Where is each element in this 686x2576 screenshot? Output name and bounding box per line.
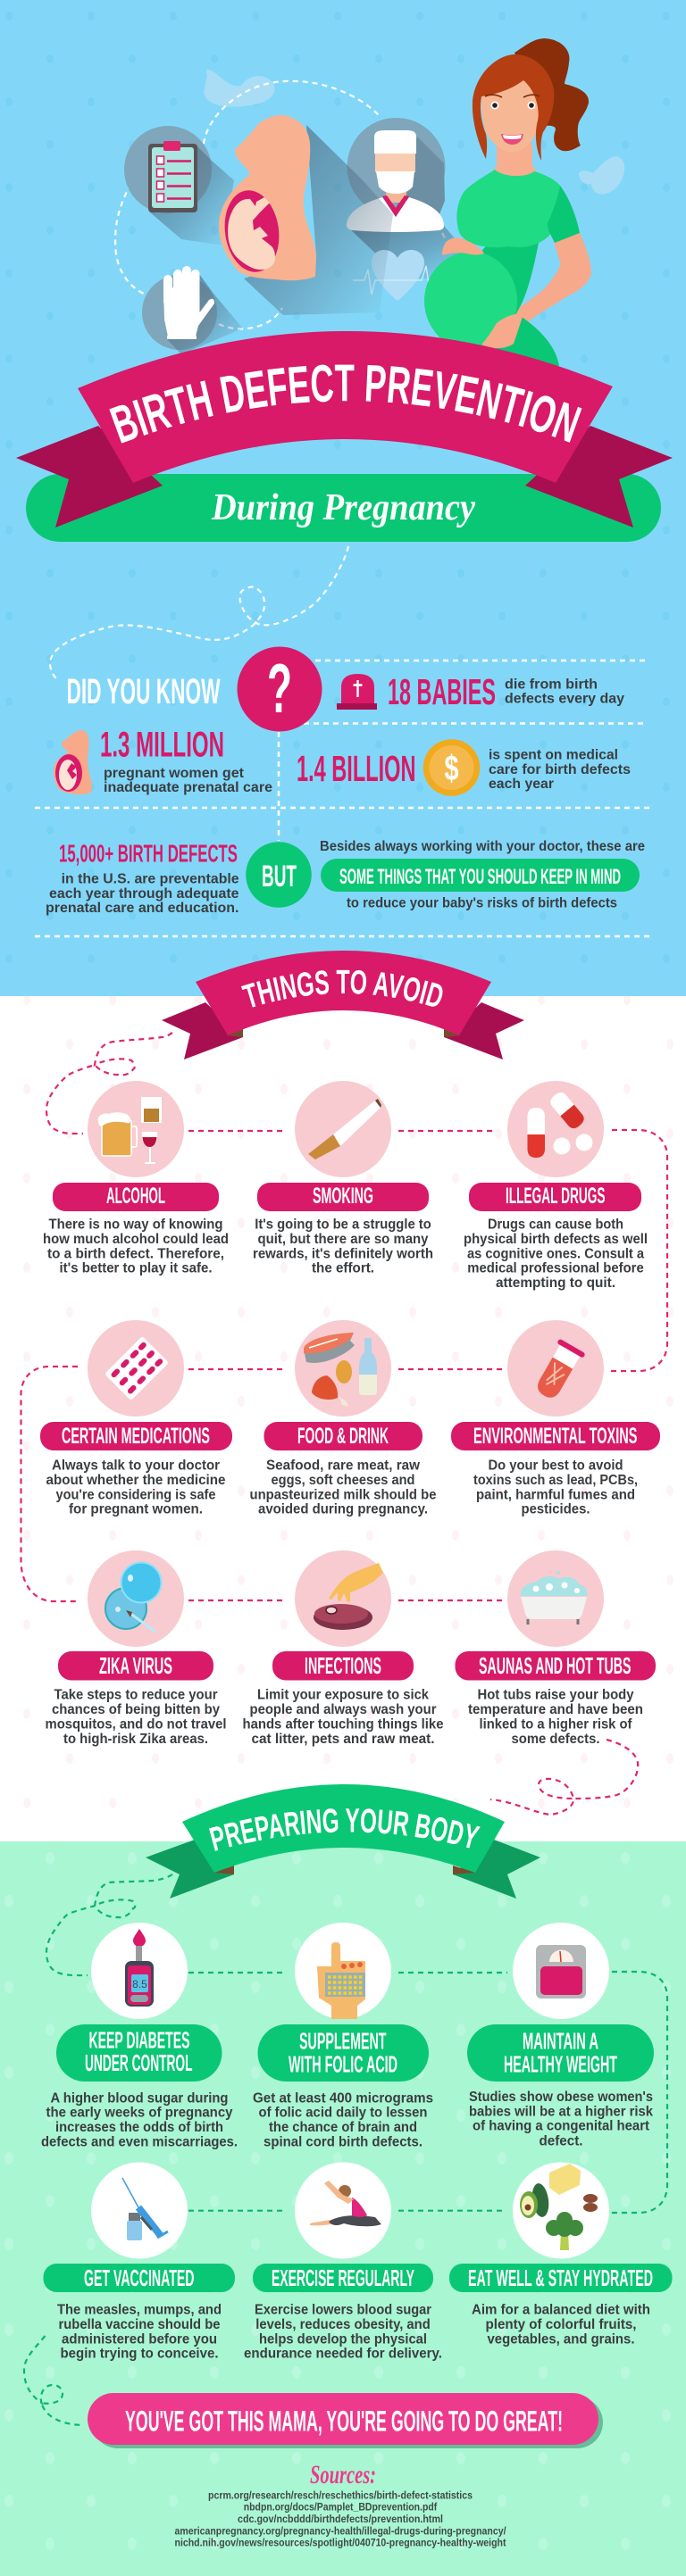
description	[468, 1688, 643, 1747]
source links: nichd.nih.gov/news/resources/spotlight/040710-pregnancy-healthy-weight	[175, 2537, 506, 2549]
description: defect.	[540, 2133, 582, 2148]
description	[469, 2090, 653, 2148]
sleeve	[548, 186, 580, 243]
neck	[490, 143, 539, 180]
description: rubella vaccine should be	[59, 2317, 221, 2332]
stat: 18 babies: 18 BABIES	[388, 671, 496, 712]
description: eggs, soft cheeses and	[272, 1473, 414, 1488]
icon: tombstone	[337, 674, 377, 710]
description: people and always wash your	[250, 1702, 436, 1717]
description	[472, 2303, 650, 2347]
label pill: CERTAIN MEDICATIONS	[62, 1424, 210, 1449]
description: toxins such as lead, PCBs,	[473, 1473, 638, 1488]
description: of having a congenital heart	[473, 2119, 649, 2134]
label pill: SUPPLEMENT	[299, 2029, 387, 2054]
icon: virus cell and needle	[88, 1550, 184, 1647]
description	[45, 1688, 227, 1747]
label pill: INFECTIONS	[305, 1652, 381, 1679]
stat: 1.3 million	[54, 725, 272, 795]
description: The measles, mumps, and	[57, 2303, 222, 2318]
description: chances of being bitten by	[52, 1702, 220, 1717]
icon: heart rate	[353, 250, 432, 301]
stat: 1.3 million: inadequate prenatal care	[104, 780, 272, 795]
icon: womb with fetus	[219, 115, 393, 315]
card: infections	[243, 1550, 444, 1747]
heading: did you know: DID YOU KNOW	[66, 672, 221, 711]
banner: things to avoid: THINGS TO AVOID	[241, 969, 443, 1007]
icon: yoga figure	[295, 2162, 391, 2258]
description	[57, 2303, 222, 2362]
label pill	[40, 1422, 232, 1450]
label pill: GET VACCINATED	[84, 2266, 195, 2291]
label pill: EXERCISE REGULARLY	[272, 2266, 414, 2291]
card: keep diabetes under control	[41, 1923, 238, 2149]
icon: hand and raw meat	[295, 1550, 391, 1647]
stat: 18 babies: die from birth	[505, 677, 598, 693]
card: eat well and stay hydrated	[449, 2162, 672, 2347]
description: the chance of brain and	[269, 2120, 417, 2135]
description	[464, 1217, 648, 1291]
card: get vaccinated	[43, 2162, 235, 2362]
label pill: ALCOHOL	[106, 1184, 165, 1209]
label pill	[272, 1651, 414, 1680]
right ribbon tail	[525, 426, 673, 528]
description: cat litter, pets and raw meat.	[252, 1732, 434, 1747]
icon: beer and wine	[88, 1081, 184, 1177]
card: environmental toxins	[451, 1320, 660, 1517]
card: smoking	[253, 1081, 433, 1276]
label pill: UNDER CONTROL	[85, 2051, 193, 2076]
stat: 18 babies: defects every day	[505, 692, 624, 707]
description: It's going to be a struggle to	[255, 1217, 431, 1233]
description	[43, 1217, 229, 1276]
description: increases the odds of birth	[55, 2120, 223, 2135]
description: Seafood, rare meat, raw	[266, 1458, 421, 1473]
description: linked to a higher risk of	[479, 1716, 632, 1732]
icon: glucose meter	[91, 1923, 188, 2019]
label pill: ILLEGAL DRUGS	[506, 1184, 606, 1209]
description: as cognitive ones. Consult a	[467, 1246, 644, 1261]
icon: bathroom scale	[513, 1923, 609, 2019]
source links: americanpregnancy.org/pregnancy-health/illegal-drugs-during-pregnancy/	[175, 2524, 506, 2537]
description: defects and even miscarriages.	[41, 2134, 238, 2149]
card: certain medications	[40, 1320, 232, 1517]
description: to a birth defect. Therefore,	[47, 1246, 224, 1261]
icon: glove	[142, 266, 243, 354]
panel: did you know statistics	[35, 646, 651, 936]
card: alcohol	[43, 1081, 229, 1276]
label pill	[43, 2264, 235, 2292]
source links	[175, 2489, 506, 2549]
description	[244, 2303, 442, 2362]
stat: 1.3 million: pregnant women get	[104, 766, 244, 781]
label pill: WITH FOLIC ACID	[289, 2053, 397, 2078]
dashed connector into stats	[50, 546, 348, 680]
keep in mind callout	[320, 839, 645, 911]
source links: nbdpn.org/docs/Pamplet_BDprevention.pdf	[244, 2501, 438, 2514]
arm behind	[481, 233, 591, 347]
label pill	[253, 2264, 433, 2292]
closing message pill	[88, 2393, 603, 2448]
label pill	[469, 1183, 641, 1211]
description: A higher blood sugar during	[50, 2090, 229, 2106]
description	[253, 1217, 433, 1276]
icon: test tube	[507, 1320, 604, 1417]
description: Take steps to reduce your	[54, 1688, 218, 1703]
icon: salmon, egg, ham, milk	[295, 1320, 391, 1417]
description: attempting to quit.	[496, 1276, 615, 1291]
banner: preparing your body	[146, 1784, 540, 1899]
description: some defects.	[511, 1732, 600, 1747]
description: Get at least 400 micrograms	[253, 2090, 433, 2106]
description: spinal cord birth defects.	[264, 2134, 422, 2149]
keep in mind callout: Besides always working with your doctor, these are	[320, 839, 645, 854]
face	[481, 77, 543, 153]
but badge: BUT	[262, 860, 297, 893]
faint baby silhouettes	[204, 70, 624, 194]
label pill	[264, 1422, 422, 1450]
title text: BIRTH DEFECT PREVENTION	[109, 364, 582, 444]
dividers and vertical line	[35, 661, 651, 936]
card: illegal drugs	[464, 1081, 648, 1291]
description: babies will be at a higher risk	[469, 2104, 653, 2119]
description: hands after touching things like	[243, 1716, 444, 1732]
connector lines: preparing your body	[24, 1874, 667, 2425]
keep in mind callout: to reduce your baby's risks of birth defects	[347, 896, 617, 911]
icon: cigarette	[295, 1081, 391, 1177]
description: quit, but there are so many	[257, 1232, 429, 1247]
description: for pregnant women.	[69, 1502, 203, 1517]
source links: pcrm.org/research/resch/reschethics/birth-defect-statistics	[208, 2489, 473, 2501]
description	[250, 1458, 437, 1517]
description	[41, 2090, 238, 2149]
question mark badge	[238, 646, 322, 732]
card: maintain a healthy weight	[467, 1923, 654, 2148]
card: exercise regularly	[244, 2162, 442, 2362]
description: Aim for a balanced diet with	[472, 2303, 650, 2318]
description: mosquitos, and do not travel	[45, 1716, 227, 1732]
question mark badge: ?	[267, 649, 292, 727]
stat: 15,000+ birth defects	[46, 840, 239, 916]
eyes	[485, 95, 540, 109]
description: begin trying to conceive.	[61, 2347, 218, 2362]
stat: 1.3 million: 1.3 MILLION	[100, 725, 224, 764]
icon: doctor	[347, 118, 466, 278]
description: Limit your exposure to sick	[257, 1688, 429, 1703]
stat: 1.4 billion	[297, 739, 631, 796]
label pill: KEEP DIABETES	[89, 2028, 189, 2053]
ribbon subtitle pill	[26, 474, 661, 542]
description: levels, reduces obesity, and	[255, 2317, 431, 2332]
belly	[424, 252, 517, 350]
label pill	[58, 1651, 213, 1680]
description: the early weeks of pregnancy	[46, 2106, 233, 2121]
description: physical birth defects as well	[464, 1232, 648, 1247]
left ribbon tail	[16, 426, 163, 528]
stat: 15,000+ birth defects: each year through adequate	[49, 886, 239, 902]
card: supplement with folic acid	[253, 1923, 433, 2149]
label pill	[257, 2024, 429, 2082]
description: Studies show obese women's	[469, 2090, 653, 2105]
description: Drugs can cause both	[488, 1217, 623, 1233]
icon: healthy foods	[513, 2162, 609, 2258]
label pill	[257, 1183, 429, 1211]
title ribbon	[16, 331, 673, 542]
sources heading: Sources:	[310, 2460, 376, 2489]
icon: hand holding pills	[295, 1923, 391, 2019]
stat: 1.4 billion: 1.4 BILLION	[297, 748, 416, 789]
icon: syringe and vial	[91, 2162, 188, 2258]
connector lines: things to avoid	[21, 1033, 667, 1815]
description: rewards, it's definitely worth	[253, 1246, 433, 1261]
hair ponytail	[514, 38, 589, 151]
description: vegetables, and grains.	[488, 2331, 634, 2347]
stat: 1.4 billion: each year	[489, 777, 554, 792]
description: avoided during pregnancy.	[258, 1502, 428, 1517]
stat: 1.4 billion: care for birth defects	[489, 762, 631, 777]
description: you're considering is safe	[55, 1487, 216, 1502]
banner: things to avoid	[162, 951, 524, 1059]
source links: cdc.gov/ncbddd/birthdefects/prevention.html	[238, 2513, 443, 2525]
stat: 18 babies	[337, 671, 624, 712]
mouth	[501, 134, 523, 145]
woman	[424, 38, 591, 375]
description	[46, 1458, 226, 1517]
description: Do your best to avoid	[488, 1458, 623, 1473]
description: to high-risk Zika areas.	[63, 1732, 208, 1747]
stat: 1.4 billion: is spent on medical	[489, 748, 618, 763]
label pill	[53, 1183, 219, 1211]
description: of folic acid daily to lessen	[259, 2106, 427, 2121]
label pill: MAINTAIN A	[523, 2029, 598, 2054]
description: paint, harmful fumes and	[476, 1487, 635, 1502]
icon: glucose meter: 8.5	[132, 1978, 147, 1990]
description	[243, 1688, 444, 1747]
label pill: FOOD & DRINK	[297, 1424, 389, 1449]
description: Always talk to your doctor	[52, 1458, 220, 1473]
stat: 15,000+ birth defects: 15,000+ BIRTH DEFECTS	[59, 840, 238, 868]
description: pesticides.	[522, 1502, 590, 1517]
card: zika virus	[45, 1550, 227, 1747]
icon: clipboard	[124, 126, 234, 245]
description: about whether the medicine	[46, 1473, 226, 1488]
front hair	[473, 54, 554, 161]
description: it's better to play it safe.	[59, 1261, 213, 1276]
description: endurance needed for delivery.	[244, 2347, 442, 2362]
card: saunas and hot tubs	[456, 1550, 656, 1747]
description: the effort.	[312, 1261, 374, 1276]
description: helps develop the physical	[259, 2331, 427, 2347]
stat: 15,000+ birth defects: prenatal care and education.	[46, 901, 239, 916]
dress body	[482, 214, 559, 375]
description: Hot tubs raise your body	[477, 1688, 634, 1703]
main ribbon	[78, 331, 613, 483]
description: plenty of colorful fruits,	[486, 2317, 636, 2332]
banner: preparing your body: PREPARING YOUR BODY	[209, 1808, 481, 1851]
card: food and drink	[250, 1320, 437, 1517]
icon: dollar coin: $	[445, 749, 459, 788]
description: how much alcohol could lead	[43, 1232, 229, 1247]
description: unpasteurized milk should be	[250, 1487, 437, 1502]
label pill	[467, 2024, 654, 2082]
icon: dollar coin	[423, 739, 480, 796]
stat: 15,000+ birth defects: in the U.S. are preventable	[62, 871, 239, 886]
description: There is no way of knowing	[48, 1217, 223, 1233]
icon: pregnant torso	[54, 730, 92, 794]
label pill: SMOKING	[313, 1184, 373, 1209]
description: Exercise lowers blood sugar	[255, 2303, 431, 2318]
icon: pills	[507, 1081, 604, 1177]
description: temperature and have been	[468, 1702, 643, 1717]
sources	[175, 2460, 506, 2549]
label pill: ZIKA VIRUS	[99, 1652, 172, 1679]
dashed route lines	[115, 81, 447, 328]
description	[253, 2090, 433, 2149]
hand on belly	[442, 237, 484, 255]
icon: bathtub	[507, 1550, 604, 1647]
hero illustration	[115, 38, 624, 375]
label pill	[56, 2024, 222, 2082]
description: medical professional before	[467, 1261, 644, 1276]
lower hand	[481, 313, 523, 348]
description	[473, 1458, 638, 1517]
description: administered before you	[62, 2331, 217, 2347]
but badge	[246, 842, 312, 908]
subtitle: During Pregnancy	[211, 487, 475, 528]
icon: blister pack	[88, 1320, 184, 1417]
